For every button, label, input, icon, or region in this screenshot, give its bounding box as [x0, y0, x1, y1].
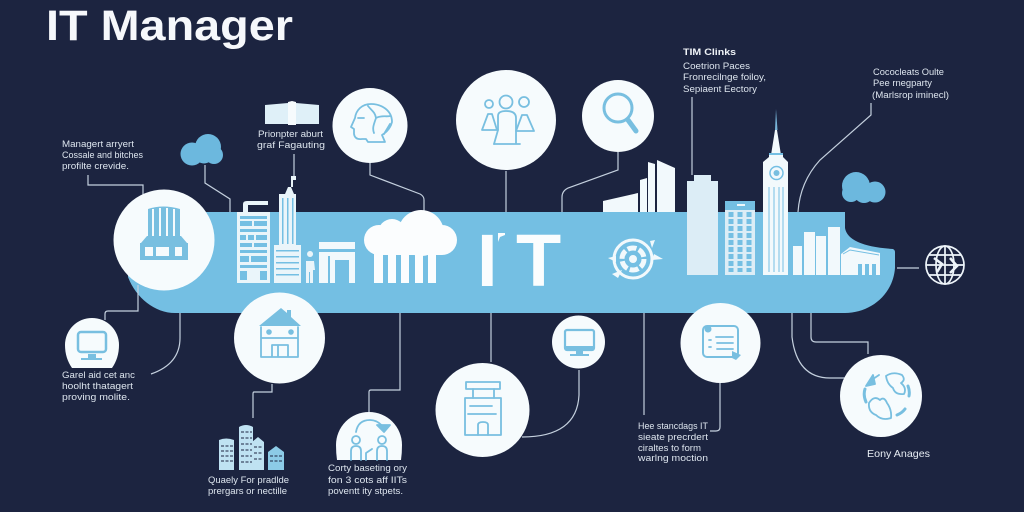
text: checklist note: sieate precrdert — [638, 432, 708, 443]
node: head circle — [332, 88, 408, 163]
node: document building circle — [436, 363, 530, 457]
title: IT Manager — [46, 2, 293, 50]
icon: checklist card — [703, 326, 741, 360]
text: city note: Quaely For pradlde — [208, 475, 289, 486]
icon: magnifying glass — [604, 94, 636, 131]
icon: monitor — [565, 330, 594, 356]
text: top right note: (Marlsrop iminecl) — [872, 90, 949, 101]
person figure — [306, 251, 315, 283]
building with windows — [237, 201, 270, 283]
skyline right: blocks and clock tower — [687, 109, 880, 275]
text: checklist note — [637, 421, 708, 464]
skyline left — [237, 176, 457, 283]
node: building circle — [114, 190, 214, 290]
window building — [725, 201, 755, 275]
icon: rotating globe — [864, 373, 909, 419]
central blue band — [128, 212, 895, 313]
text: checklist note: ciraltes to form — [638, 443, 701, 454]
icon: monitor — [78, 332, 106, 360]
node: house circle — [234, 292, 325, 384]
text: people exchange note — [328, 463, 407, 497]
text: book note: Prionpter aburt — [258, 129, 323, 140]
text: top left note: profilte crevide. — [62, 161, 129, 172]
text: lower left note: hoolht thatagert — [62, 381, 133, 392]
text: city note: prergars or nectille — [208, 486, 287, 497]
skyline right: stepped towers — [603, 160, 675, 212]
icon: open book — [265, 101, 319, 125]
text: people exchange note: poventt ity stpets. — [328, 486, 403, 497]
low hall — [841, 247, 880, 275]
text: top centre-right note: Coetrion Paces — [683, 61, 750, 72]
icon: city buildings — [219, 425, 284, 470]
text: top centre-right note — [683, 47, 766, 95]
icon: ship wheel — [608, 240, 663, 278]
node: world map circle — [840, 355, 922, 437]
text: checklist note: warlng moction — [637, 453, 708, 464]
tall block — [687, 175, 718, 275]
icon: human head — [351, 104, 392, 142]
text: city note — [208, 475, 289, 497]
text: checklist note: Hee stancdags IT — [638, 421, 708, 432]
clock tower — [763, 109, 788, 275]
skyscraper — [274, 176, 301, 283]
cloud: top left — [180, 134, 223, 166]
text: top centre-right note: Sepiaent Eectory — [683, 84, 757, 95]
text: book note — [257, 129, 325, 151]
connector lines — [88, 97, 919, 437]
icon: document building — [465, 382, 501, 435]
storefront — [319, 242, 355, 283]
cloud: top right — [842, 172, 886, 203]
node: magnifier circle — [582, 80, 654, 152]
text: top right note: Cococleats Oulte — [873, 67, 944, 78]
node: monitor circle — [552, 316, 605, 368]
text: people exchange note: Corty baseting ory — [328, 463, 407, 474]
icon: two people with arrow — [351, 420, 390, 460]
text: top left note: Cossale and bitches — [62, 150, 143, 161]
text: top left note: Managert arryert — [62, 139, 134, 150]
icon: columned building — [140, 206, 188, 260]
bars — [793, 227, 840, 275]
text: people exchange note: fon 3 cots aff IITs — [328, 475, 407, 486]
icon: three people — [482, 96, 534, 144]
text: lower left note: Garel aid cet anc — [62, 370, 135, 381]
text: lower left note: proving molite. — [62, 392, 130, 403]
node: monitor small left — [65, 318, 119, 368]
connector: band to small monitor — [105, 285, 138, 320]
IT wordmark: IT — [477, 219, 561, 302]
cloud with columns — [364, 210, 457, 283]
node: people circle — [456, 70, 556, 170]
node: clipped people exchange circle — [336, 412, 402, 460]
icon: house — [259, 308, 301, 357]
text: top left note — [62, 139, 143, 172]
text: world map label: Eony Anages — [867, 448, 930, 460]
text: top right note — [872, 67, 949, 101]
icon: globe — [926, 246, 964, 284]
text: top centre-right note: Fronrecilnge foiloy, — [683, 72, 766, 83]
text: lower left note — [62, 370, 135, 403]
text: book note: graf Fagauting — [257, 140, 325, 151]
text: top centre-right note: TIM Clinks — [683, 47, 736, 58]
text: top right note: Pee rnegparty — [873, 78, 932, 89]
node: checklist circle — [680, 303, 760, 383]
